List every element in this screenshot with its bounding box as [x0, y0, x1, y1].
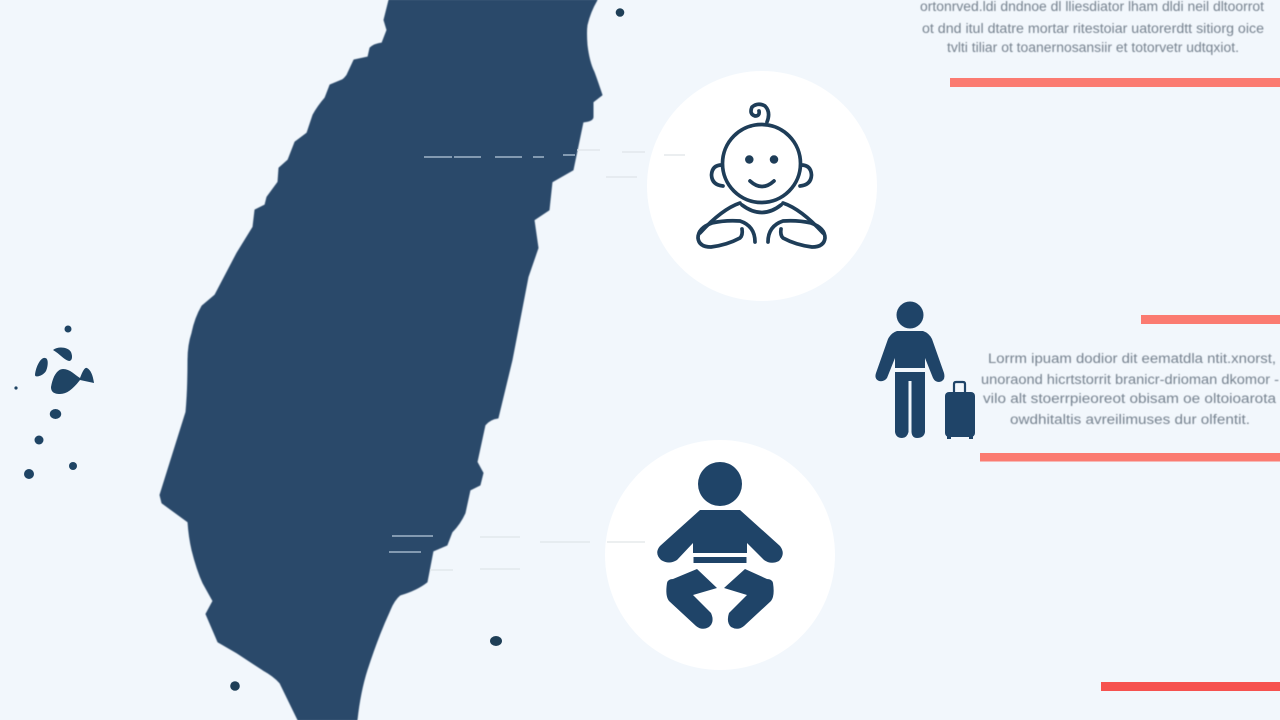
text block: middle right: owdhitaltis avreilimuses dur olfentit. — [1010, 412, 1250, 427]
accent bar 3 — [980, 453, 1280, 462]
map: main island — [160, 0, 602, 720]
map: dashed leader lines, lower — [389, 536, 645, 570]
text block: top right: ot dnd itul dtatre mortar ritestoiar uatorerdtt sitiorg oice — [922, 21, 1264, 36]
icon: traveller with suitcase — [875, 302, 975, 439]
accent bar 4 — [1101, 682, 1280, 691]
circle badge: diaper baby — [605, 440, 835, 670]
text block: top right — [920, 0, 1264, 55]
icon: diaper baby silhouette — [657, 462, 783, 629]
accent bar 2 — [1141, 315, 1280, 324]
suitcase — [945, 382, 975, 439]
text block: middle right: unoraond hicrtstorrit branicr-drioman dkomor - — [981, 372, 1279, 387]
text block: top right: tvlti tiliar ot toanernosansiir et totorvetr udtqxiot. — [947, 40, 1239, 55]
text block: middle right: vilo alt stoerrpieoreot obisam oe oltoioarota — [983, 391, 1277, 406]
offshore islets, left — [14, 326, 94, 479]
map: dashed leader lines, upper — [424, 150, 685, 177]
text block: middle right: Lorrm ipuam dodior dit eematdla ntit.xnorst, — [988, 351, 1276, 366]
circle badge: smiling baby — [647, 71, 877, 301]
accent bar 1 — [950, 78, 1280, 87]
text block: middle right — [981, 351, 1279, 427]
icon: baby outline — [698, 104, 825, 247]
small islets around the map — [230, 8, 624, 691]
